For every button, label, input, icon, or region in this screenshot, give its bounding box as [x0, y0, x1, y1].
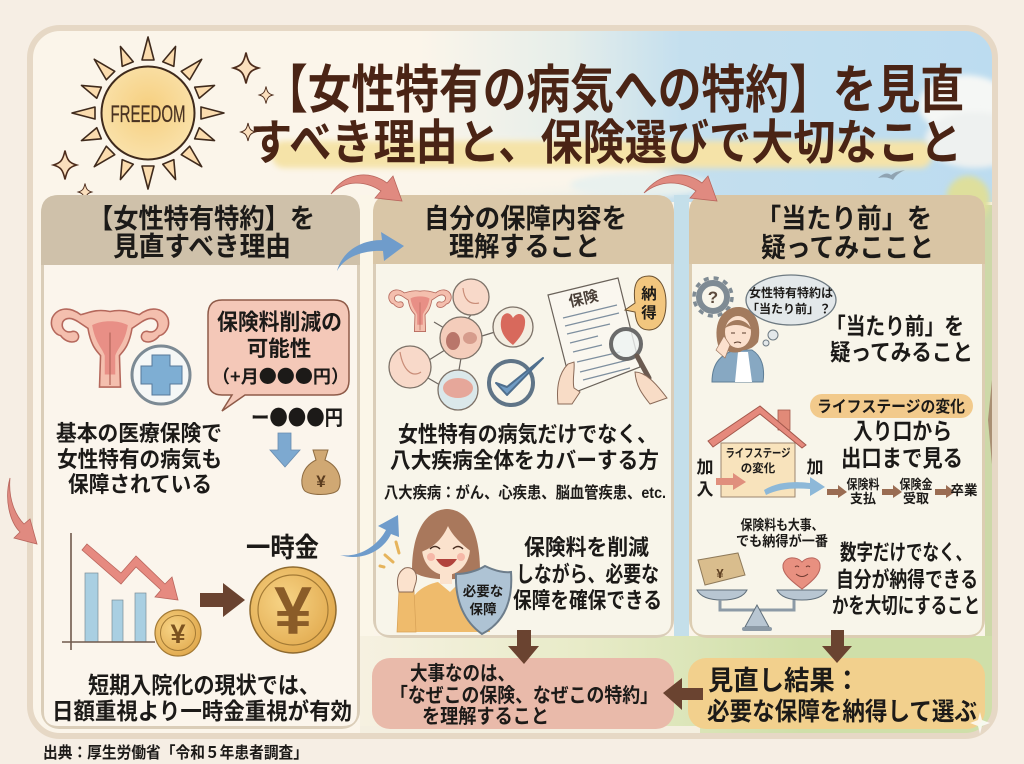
icon: gear with question mark — [694, 278, 732, 316]
icon: small yen coin: ¥ — [170, 619, 186, 649]
labels: join — [696, 458, 824, 499]
icon: shield: 必要な — [463, 583, 503, 599]
icon: uterus with medical cross — [51, 309, 190, 404]
title highlight — [272, 141, 932, 168]
flow: premium, payout, graduation: 受取 — [903, 491, 929, 506]
arrow: blue curve to panel 2 top — [337, 232, 404, 271]
text: not only numbers: かを大切にすること — [832, 594, 980, 618]
text: not only numbers — [832, 541, 980, 618]
arrow: down to pink box — [508, 630, 539, 664]
text: question the norm: 疑ってみること — [830, 339, 973, 365]
callout: satisfaction — [625, 276, 666, 330]
icon: gear with question mark: ? — [708, 288, 718, 307]
text: lump sum recommendation: 日額重視より一時金重視が有効 — [52, 698, 352, 724]
icon: small yen coin — [155, 610, 201, 656]
text: question the norm: 「当たり前」を — [826, 313, 964, 339]
thought bubble: 女性特有特約は — [749, 285, 833, 300]
text: reduce premium: 保険料を削減 — [524, 535, 649, 560]
icon: sun with FREEDOM: FREEDOM — [110, 101, 186, 128]
arrow: red curve left edge — [8, 478, 37, 544]
text: balance caption: でも納得が一番 — [736, 533, 828, 549]
text: eight major diseases — [384, 422, 666, 502]
text: lump sum recommendation: 短期入院化の現状では、 — [88, 672, 320, 698]
illustration: worried woman — [712, 307, 764, 382]
label pill: life stage — [810, 394, 973, 418]
label pill: life stage: ライフステージの変化 — [817, 397, 965, 416]
icon: life stage house — [708, 406, 806, 497]
labels: join: 加 — [806, 458, 824, 477]
arrow: red curve top right — [644, 175, 717, 201]
callout: premium reduction: （+月●●●円） — [212, 363, 349, 389]
icon: balance scale with money and heart: ¥ — [716, 566, 724, 581]
icon: big yen coin — [250, 567, 336, 653]
icon: life stage house: の変化 — [741, 461, 776, 475]
title — [250, 62, 964, 170]
icon: yen money bag: ¥ — [316, 472, 326, 491]
arrow: left to pink box — [663, 678, 703, 710]
text: question the norm — [826, 313, 973, 365]
panel: question assumptions — [689, 195, 985, 638]
bar chart: falling trend — [62, 533, 178, 650]
callout: premium reduction: 保険料削減の — [217, 310, 342, 335]
thought bubble — [746, 275, 836, 346]
text: reduce premium: しながら、必要な — [516, 562, 659, 587]
thought bubble: 「当たり前」？ — [747, 301, 831, 316]
sparkle watermark — [970, 712, 990, 734]
source note: 出典：厚生労働省「令和５年患者調査」 — [43, 743, 308, 762]
icon: shield — [456, 566, 511, 634]
text: basic medical insurance: 女性特有の病気も — [57, 447, 222, 472]
callout: understand why this insurance: 「なぜこの保険、なぜこの特約」 — [390, 684, 658, 707]
text: basic medical insurance — [56, 421, 222, 497]
callout: understand why this insurance: 大事なのは、 — [410, 662, 515, 685]
text: eight major diseases: 女性特有の病気だけでなく、 — [398, 422, 657, 447]
text: entrance to exit: 入り口から — [853, 418, 952, 444]
panel heading: 自分の保障内容を — [424, 204, 627, 234]
panel heading — [88, 204, 315, 262]
text: eight major diseases: 八大疾病全体をカバーする方 — [390, 448, 659, 473]
callout: satisfaction: 得 — [641, 304, 657, 322]
label: minus amount: ー●●●円 — [251, 402, 343, 432]
panel: understand coverage — [373, 195, 674, 638]
panel heading: 理解すること — [449, 232, 600, 262]
callout: premium reduction: 可能性 — [247, 337, 311, 361]
flow: premium, payout, graduation: 保険料 — [846, 477, 880, 492]
text: basic medical insurance: 基本の医療保険で — [56, 421, 222, 446]
arrow: down to yellow box — [822, 630, 852, 663]
text: reduce premium: 保障を確保できる — [513, 588, 662, 613]
callout: premium reduction — [208, 300, 349, 411]
icon: insurance document with magnifier: 保険 — [567, 288, 600, 311]
panel heading — [756, 204, 934, 263]
flow: premium, payout, graduation: 保険金 — [900, 477, 932, 492]
panel heading — [424, 204, 627, 262]
icon: shield: 保障 — [470, 601, 497, 617]
icon: down arrow — [270, 433, 300, 467]
text: balance caption: 保険料も大事、 — [740, 517, 824, 533]
icon: balance scale with money and heart — [697, 553, 827, 631]
text: eight major diseases: 八大疾病：がん、心疾患、脳血管疾患、etc. — [384, 483, 666, 502]
panel: reasons to review — [41, 195, 360, 729]
text: balance caption — [736, 517, 828, 549]
text: reduce premium — [513, 535, 662, 613]
icon: insurance document with magnifier — [548, 278, 667, 404]
arrow: blue curve to panel 2 bottom — [340, 515, 399, 557]
labels: join: 加 — [696, 458, 714, 477]
flow: premium, payout, graduation — [827, 477, 978, 506]
labels: join: 入 — [696, 480, 714, 499]
panel heading: 【女性特有特約】を — [88, 204, 315, 234]
flow: premium, payout, graduation: 支払 — [850, 491, 876, 506]
panel heading: 見直すべき理由 — [113, 232, 291, 262]
callout: satisfaction: 納 — [641, 285, 657, 303]
icon: yen money bag — [302, 450, 340, 494]
icon: big yen coin: ¥ — [274, 573, 312, 649]
page background — [405, 31, 992, 733]
callout: understand why this insurance: を理解すること — [422, 705, 549, 728]
panel heading: 「当たり前」を — [756, 204, 932, 234]
callout: review result: 見直し結果： — [708, 666, 860, 696]
text: basic medical insurance: 保障されている — [68, 472, 212, 497]
sparkles — [53, 52, 273, 200]
icon: organ network — [389, 279, 543, 410]
illustration: happy woman with shield — [380, 509, 490, 632]
text: entrance to exit: 出口まで見る — [841, 445, 963, 471]
text: not only numbers: 数字だけでなく、 — [840, 541, 972, 565]
text: entrance to exit — [841, 418, 963, 471]
arrows: enter and leave — [716, 473, 825, 496]
panel heading: 疑ってみここと — [761, 233, 934, 263]
arrow: red curve top left — [331, 175, 402, 201]
callout: understand why this insurance — [372, 658, 674, 729]
arrow to lump sum — [200, 583, 245, 617]
icon: sun with FREEDOM — [72, 37, 224, 189]
callout: review result — [688, 658, 985, 729]
label: lump sum: 一時金 — [246, 533, 319, 563]
icon: life stage house: ライフステージ — [726, 447, 791, 460]
text: not only numbers: 自分が納得できる — [836, 567, 978, 592]
flow: premium, payout, graduation: 卒業 — [950, 483, 978, 498]
text: lump sum recommendation — [52, 672, 352, 724]
callout: review result: 必要な保障を納得して選ぶ — [707, 698, 977, 726]
